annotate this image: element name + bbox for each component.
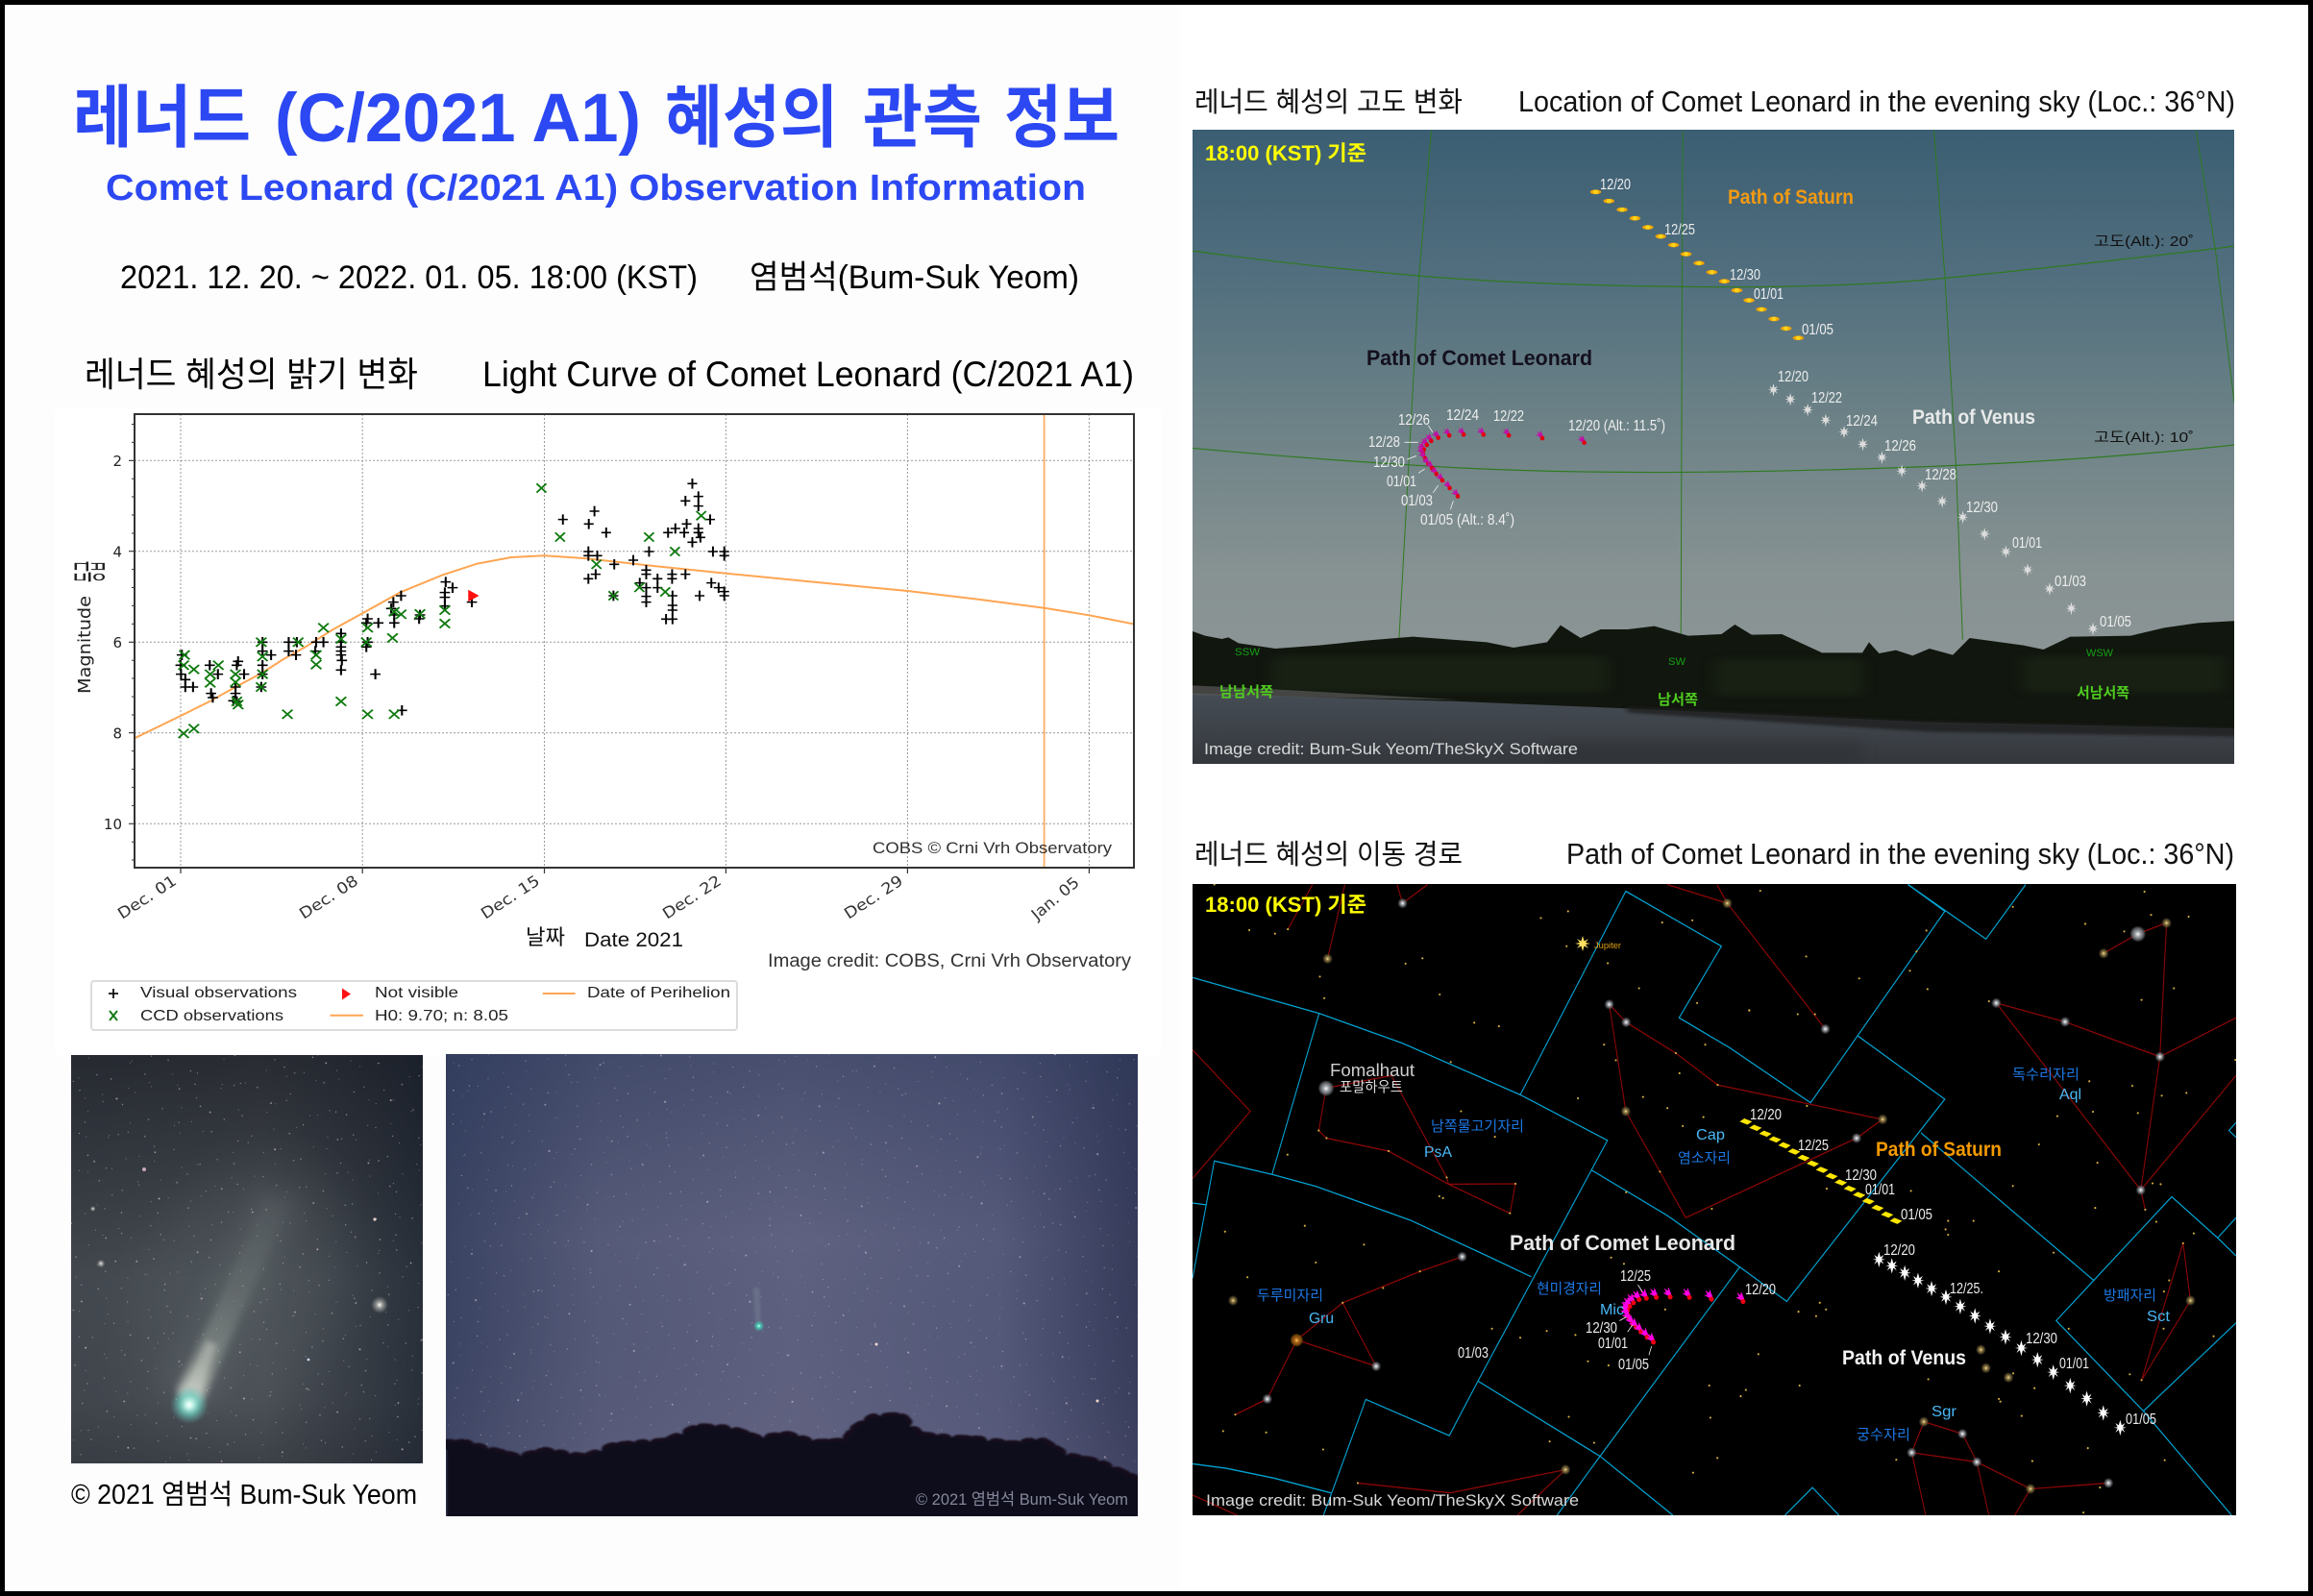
constellation name labels: Mic bbox=[1600, 1302, 1624, 1318]
horizon landscape bbox=[1192, 621, 2239, 769]
chart image credit: Image credit: COBS, Crni Vrh Observatory bbox=[768, 951, 1132, 971]
Comet Leonard path markers bbox=[1405, 426, 1585, 509]
heading: path Korean: 레너드 혜성의 이동 경로 bbox=[1194, 840, 1463, 871]
Comet date labels: 01/01 bbox=[1598, 1336, 1628, 1352]
Venus date labels: 12/30 bbox=[2026, 1331, 2057, 1347]
Comet date labels: 01/05 (Alt.: 8.4˚) bbox=[1420, 512, 1514, 528]
Comet date labels: 12/25 bbox=[1620, 1268, 1651, 1285]
chart legend bbox=[91, 981, 737, 1030]
Saturn date labels: 01/05 bbox=[1802, 322, 1833, 338]
x axis date labels: Jan. 05 bbox=[1027, 873, 1083, 924]
Comet date labels bbox=[1458, 1268, 1776, 1373]
panel: light curve chart: 등급 bbox=[70, 561, 110, 582]
compass direction labels: WSW bbox=[2086, 648, 2114, 659]
subtitle: Comet Leonard (C/2021 A1) Observation Information bbox=[106, 168, 1086, 209]
title: 레너드 bbox=[73, 81, 251, 157]
Comet date labels: 01/03 bbox=[1458, 1345, 1489, 1362]
author: 염범석(Bum-Suk Yeom) bbox=[750, 259, 1079, 296]
Comet date labels: 12/24 bbox=[1446, 407, 1479, 424]
heading: light curve English: Light Curve of Comet Leonard (C/2021 A1) bbox=[482, 355, 1134, 394]
black sky bbox=[1193, 884, 2236, 1515]
Venus date labels: 01/05 bbox=[2126, 1412, 2156, 1428]
Comet label: Path of Comet Leonard bbox=[1510, 1231, 1735, 1255]
Comet Leonard path markers bbox=[1619, 1285, 1743, 1355]
Comet date labels bbox=[1368, 407, 1665, 528]
COBS watermark: COBS © Crni Vrh Observatory bbox=[873, 839, 1113, 857]
constellation lines, west bbox=[1193, 885, 1882, 1515]
heading: altitude change English: Location of Comet Leonard in the evening sky (Loc.: 36°N) bbox=[1518, 85, 2235, 118]
Venus date labels: 01/01 bbox=[2059, 1356, 2089, 1372]
time note: 18:00 (KST) 기준 bbox=[1205, 893, 1366, 917]
chart legend: Not visible bbox=[375, 985, 458, 1001]
right half background bbox=[1180, 0, 2313, 1596]
not visible marker bbox=[469, 591, 478, 601]
Saturn date labels: 01/01 bbox=[1754, 286, 1784, 303]
image credit: Image credit: Bum-Suk Yeom/TheSkyX Software bbox=[1206, 1491, 1579, 1510]
Venus label: Path of Venus bbox=[1912, 406, 2035, 429]
Venus date labels bbox=[1778, 369, 2131, 630]
constellation name labels: 방패자리 bbox=[2104, 1288, 2156, 1304]
Venus path markers bbox=[1774, 390, 2093, 628]
twilight sky bbox=[1193, 130, 2234, 655]
chart legend: CCD observations bbox=[140, 1008, 283, 1024]
visual observations, early December bbox=[181, 582, 472, 710]
Saturn date labels: 01/05 bbox=[1901, 1207, 1932, 1223]
Comet date labels: 12/30 bbox=[1586, 1320, 1617, 1337]
Saturn date labels: 12/30 bbox=[1730, 267, 1760, 283]
compass direction labels: 남남서쪽 bbox=[1219, 684, 1273, 700]
compass direction labels: 서남서쪽 bbox=[2077, 685, 2129, 701]
Fomalhaut label bbox=[1332, 1063, 1415, 1093]
panel: evening sky altitude chart bbox=[1192, 130, 2239, 769]
Comet date labels: 01/05 bbox=[1618, 1357, 1649, 1373]
constellation name labels: 독수리자리 bbox=[2012, 1067, 2079, 1083]
heading: altitude change Korean: 레너드 혜성의 고도 변화 bbox=[1194, 87, 1463, 118]
constellation name labels: Sct bbox=[2147, 1309, 2171, 1325]
y axis numbers: 4 bbox=[112, 544, 122, 561]
x axis date labels: Dec. 22 bbox=[659, 872, 725, 922]
Saturn date labels bbox=[1600, 177, 1833, 338]
Comet date labels: 12/26 bbox=[1398, 412, 1430, 429]
Saturn date labels: 12/25 bbox=[1798, 1138, 1829, 1154]
constellation name labels: 염소자리 bbox=[1678, 1150, 1731, 1166]
Saturn path markers bbox=[1746, 1121, 1896, 1221]
chart grid bbox=[135, 414, 1134, 868]
altitude labels: 고도(Alt.): 10˚ bbox=[2094, 430, 2194, 446]
Venus date labels: 01/05 bbox=[2100, 614, 2131, 630]
constellation name labels: Cap bbox=[1696, 1127, 1725, 1143]
x axis date labels: Dec. 15 bbox=[478, 872, 543, 922]
background stars, east bbox=[1740, 891, 2235, 1512]
title bbox=[73, 81, 1120, 157]
chart frame and ticks bbox=[129, 414, 1134, 873]
photo caption: © 2021 염범석 Bum-Suk Yeom bbox=[71, 1480, 417, 1510]
altitude labels bbox=[2094, 233, 2194, 446]
compass direction labels: 남서쪽 bbox=[1658, 692, 1698, 708]
constellation boundaries, east bbox=[1784, 885, 2236, 1515]
Jupiter marker: Jupiter bbox=[1594, 941, 1621, 951]
Venus path markers bbox=[1879, 1260, 2120, 1428]
heading: light curve Korean: 레너드 혜성의 밝기 변화 bbox=[85, 355, 418, 394]
Venus date labels bbox=[1883, 1242, 2156, 1428]
title: (C/2021 A1) bbox=[275, 81, 641, 157]
Comet label: Path of Comet Leonard bbox=[1366, 346, 1592, 370]
Comet date labels: 12/28 bbox=[1368, 434, 1400, 451]
background stars, west bbox=[1215, 885, 1749, 1483]
Venus date labels: 12/25. bbox=[1950, 1281, 1983, 1297]
Venus date labels: 12/20 bbox=[1778, 369, 1809, 385]
title: 정보 bbox=[1004, 81, 1120, 157]
photo: close-up of Comet Leonard bbox=[71, 1055, 423, 1468]
chart background bbox=[55, 408, 1161, 1055]
Venus date labels: 01/01 bbox=[2012, 535, 2042, 552]
x axis date labels: Dec. 01 bbox=[114, 872, 180, 922]
x axis label: 날짜 bbox=[526, 925, 565, 949]
panel: star chart bbox=[1193, 884, 2236, 1515]
constellation boundaries, west bbox=[1193, 885, 1945, 1515]
chart legend: Visual observations bbox=[140, 985, 297, 1001]
constellation name labels: PsA bbox=[1424, 1144, 1452, 1161]
visual observations, late December bbox=[563, 483, 725, 619]
constellation name labels: 현미경자리 bbox=[1537, 1281, 1602, 1297]
Saturn date labels: 12/20 bbox=[1600, 177, 1631, 193]
Venus date labels: 12/28 bbox=[1925, 467, 1956, 483]
Venus date labels: 12/30 bbox=[1966, 500, 1998, 516]
Fomalhaut label: Fomalhaut bbox=[1330, 1061, 1415, 1080]
Saturn path markers bbox=[1595, 192, 1798, 338]
compass direction labels: SSW bbox=[1235, 647, 1261, 658]
image credit: Image credit: Bum-Suk Yeom/TheSkyX Software bbox=[1204, 740, 1578, 758]
altitude and azimuth grid bbox=[1193, 131, 2234, 641]
date of perihelion line bbox=[1044, 414, 1046, 868]
photo: comet above tree line bbox=[446, 1054, 1141, 1521]
tree line silhouette bbox=[447, 1415, 1141, 1521]
constellation name labels bbox=[1257, 1067, 2171, 1443]
date range: 2021. 12. 20. ~ 2022. 01. 05. 18:00 (KST) bbox=[120, 259, 698, 296]
compass direction labels bbox=[1219, 647, 2129, 708]
Saturn date labels: 12/20 bbox=[1750, 1107, 1782, 1123]
Comet date labels: 01/01 bbox=[1387, 474, 1416, 490]
Jupiter marker bbox=[1575, 936, 1621, 951]
y axis numbers: 10 bbox=[104, 816, 122, 833]
Saturn date labels bbox=[1750, 1107, 1932, 1223]
altitude labels: 고도(Alt.): 20˚ bbox=[2094, 233, 2194, 250]
Comet date labels: 01/03 bbox=[1401, 493, 1433, 509]
CCD observations, late December bbox=[541, 488, 701, 596]
Venus date labels: 01/03 bbox=[2055, 574, 2086, 590]
constellation lines, east bbox=[1911, 923, 2236, 1515]
Comet date labels: 12/20 bbox=[1745, 1282, 1776, 1298]
chart legend: Date of Perihelion bbox=[587, 985, 730, 1001]
Saturn label: Path of Saturn bbox=[1728, 186, 1854, 209]
x axis date labels: Dec. 08 bbox=[296, 872, 361, 922]
heading: path English: Path of Comet Leonard in the evening sky (Loc.: 36°N) bbox=[1566, 837, 2234, 871]
light curve model line bbox=[135, 555, 1133, 738]
Saturn date labels: 01/01 bbox=[1865, 1182, 1895, 1198]
CCD observations, early December bbox=[184, 610, 445, 733]
photo watermark: © 2021 염범석 Bum-Suk Yeom bbox=[916, 1490, 1128, 1509]
title: 관측 bbox=[863, 81, 982, 157]
compass direction labels: SW bbox=[1668, 656, 1686, 668]
x axis date labels: Dec. 29 bbox=[841, 872, 906, 922]
Saturn date labels: 12/25 bbox=[1664, 222, 1695, 238]
Saturn label: Path of Saturn bbox=[1876, 1139, 2002, 1161]
panel: light curve chart bbox=[55, 408, 1161, 1055]
Venus label: Path of Venus bbox=[1842, 1347, 1966, 1369]
title: 혜성의 bbox=[665, 81, 838, 157]
chart legend: H0: 9.70; n: 8.05 bbox=[375, 1008, 508, 1024]
Saturn date labels: 12/30 bbox=[1845, 1167, 1877, 1184]
y axis numbers: 6 bbox=[112, 634, 122, 651]
Comet date labels: 12/22 bbox=[1493, 408, 1524, 425]
constellation name labels: 남쪽물고기자리 bbox=[1431, 1118, 1524, 1135]
y axis numbers bbox=[104, 453, 122, 833]
Venus date labels: 12/22 bbox=[1811, 390, 1842, 406]
x axis label English: Date 2021 bbox=[584, 929, 683, 951]
constellation name labels: Sgr bbox=[1932, 1404, 1957, 1420]
Fomalhaut label: 포말하우트 bbox=[1340, 1079, 1403, 1095]
y axis numbers: 2 bbox=[112, 453, 122, 470]
Venus date labels: 12/24 bbox=[1846, 413, 1878, 430]
Venus date labels: 12/20 bbox=[1883, 1242, 1915, 1259]
y axis label English: Magnitude bbox=[75, 596, 95, 694]
time note: 18:00 (KST) 기준 bbox=[1205, 141, 1366, 165]
Comet date labels: 12/30 bbox=[1373, 454, 1405, 471]
constellation name labels: 두루미자리 bbox=[1257, 1288, 1323, 1304]
constellation name labels: 궁수자리 bbox=[1857, 1427, 1910, 1443]
Comet date labels: 12/20 (Alt.: 11.5˚) bbox=[1568, 418, 1665, 434]
x axis date labels bbox=[114, 872, 1083, 924]
y axis numbers: 8 bbox=[112, 724, 122, 742]
constellation name labels: Gru bbox=[1309, 1311, 1334, 1327]
constellation name labels: Aql bbox=[2059, 1087, 2081, 1103]
Venus date labels: 12/26 bbox=[1884, 438, 1916, 454]
